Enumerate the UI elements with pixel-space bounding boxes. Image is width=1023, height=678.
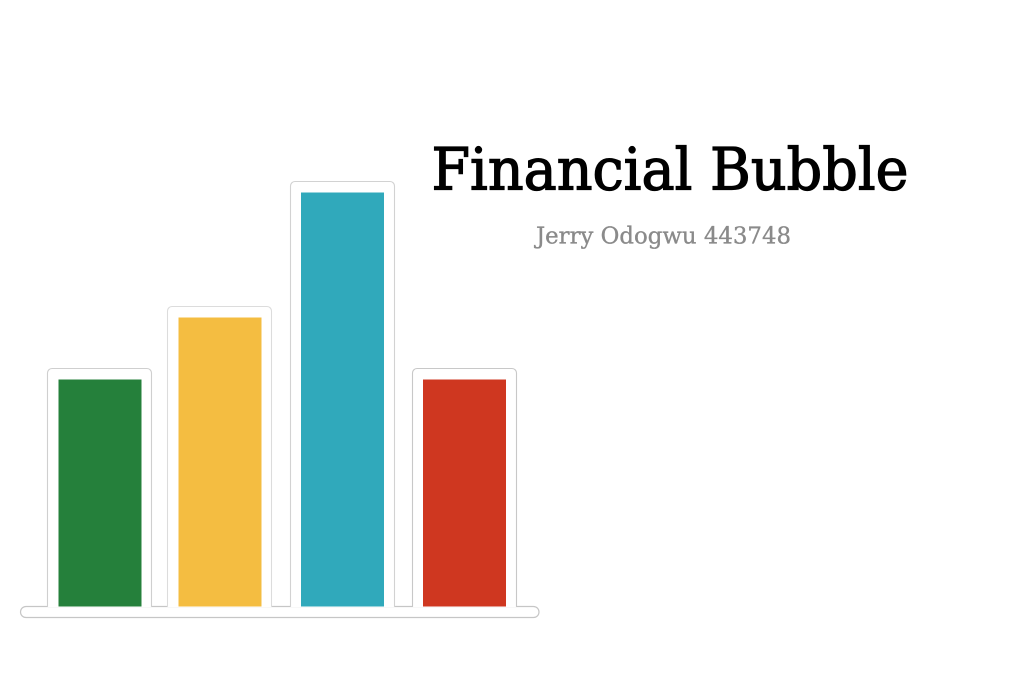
bar: yellow xyxy=(168,306,272,607)
bar: red xyxy=(412,368,516,607)
title: Financial Bubble xyxy=(432,136,908,204)
chart baseline shelf xyxy=(20,606,539,618)
subtitle: author: Jerry Odogwu 443748 xyxy=(534,224,791,250)
bar: green xyxy=(48,368,152,607)
bar: teal xyxy=(290,182,394,607)
bar chart xyxy=(20,182,539,618)
